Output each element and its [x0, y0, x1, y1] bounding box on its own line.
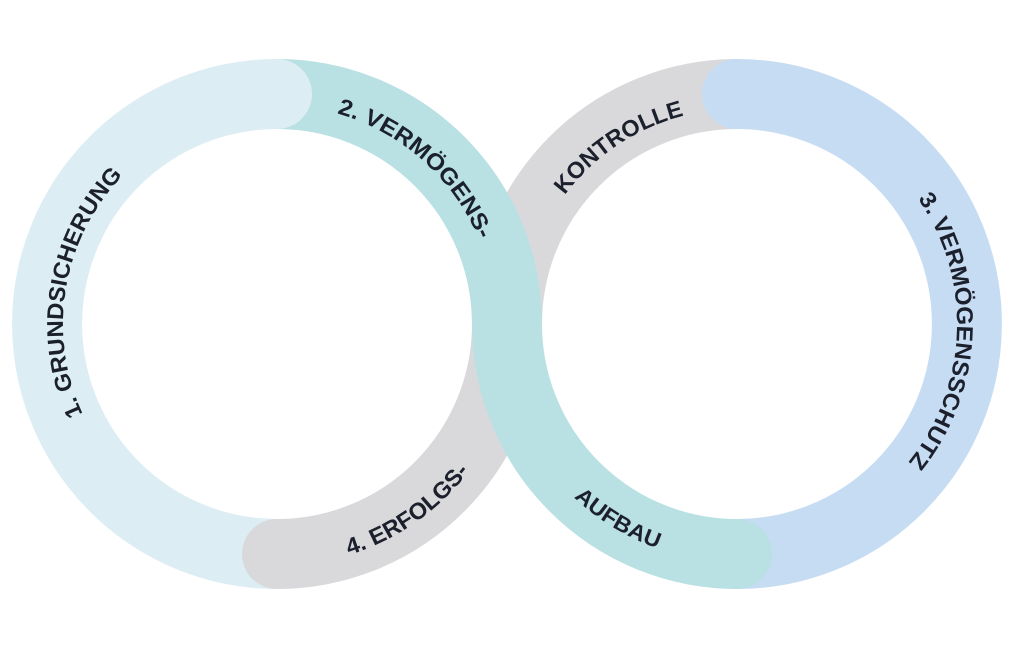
segment: grey success arc, lower left	[277, 324, 507, 554]
segment: teal wealth building S-curve	[476, 209, 737, 554]
label: 1. Grundsicherung: 1. GRUNDSICHERUNG	[47, 168, 120, 418]
label: 3. Vermögensschutz: 3. VERMÖGENSSCHUTZ	[908, 192, 976, 471]
label: Kontrolle: KONTROLLE	[553, 100, 684, 194]
segment: grey control arc, upper right	[507, 94, 737, 324]
label: Aufbau: AUFBAU	[574, 490, 662, 546]
label: 2. Vermögens-: 2. VERMÖGENS-	[338, 100, 488, 237]
segment: light blue basic security arc	[47, 94, 277, 554]
label: 4. Erfolgs-: 4. ERFOLGS-	[348, 467, 466, 553]
segment: blue asset protection arc	[737, 94, 967, 554]
segment: teal start under light blue	[277, 94, 507, 324]
